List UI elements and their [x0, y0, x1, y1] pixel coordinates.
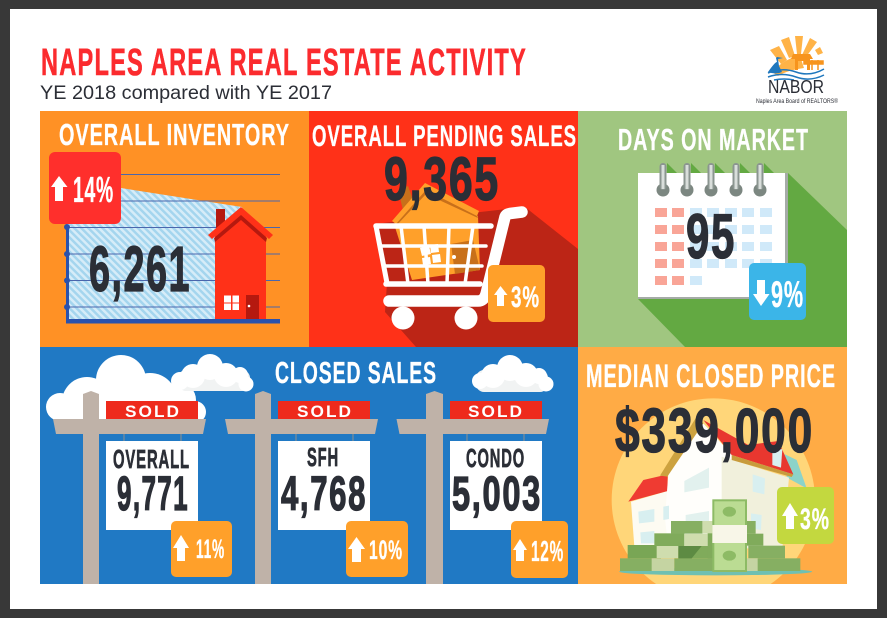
- badge: up 3%: 3%: [511, 281, 540, 314]
- badge: up 14%: [49, 152, 121, 224]
- badge: up 3%: [488, 265, 545, 322]
- sign: overall: 9,771: [117, 468, 189, 521]
- sign: SFH: 4,768: [281, 468, 367, 521]
- sign: SFH: SOLD: [297, 402, 353, 421]
- badge: up 14%: 14%: [73, 169, 114, 210]
- badge: up 10%: 10%: [369, 535, 403, 565]
- heading: overall inventory: OVERALL INVENTORY: [59, 117, 290, 152]
- icon: house in cart: [392, 183, 480, 280]
- badge: up 11%: 11%: [196, 534, 225, 564]
- icon: calendar: [638, 163, 788, 299]
- sign: overall: SOLD: [125, 402, 181, 421]
- badge: down 9%: 9%: [771, 274, 804, 315]
- sign: overall: OVERALL: [113, 444, 190, 474]
- sign: condo: [396, 391, 549, 584]
- panel: closed sales: [40, 347, 578, 584]
- value: 9,365: 9,365: [384, 145, 500, 213]
- badge: up 10%: [346, 521, 408, 577]
- icon: shopping cart: [376, 212, 522, 330]
- cart shadow: [374, 207, 578, 347]
- panel: median closed price: [578, 347, 847, 602]
- icon: large cloud: [46, 355, 206, 427]
- heading: closed sales: CLOSED SALES: [275, 355, 437, 390]
- sign: SFH: [225, 391, 378, 584]
- panel: days on market: [578, 111, 847, 347]
- badge: up 12%: 12%: [531, 536, 564, 568]
- icon: red house: [208, 207, 273, 319]
- subtitle: YE 2018 compared with YE 2017: [40, 83, 332, 104]
- badge: down 9%: [749, 263, 806, 320]
- badge: up 3%: 3%: [800, 503, 830, 536]
- panel: overall inventory: [40, 111, 309, 347]
- heading: overall pending sales: OVERALL PENDING SALES: [312, 120, 577, 153]
- sign: condo: CONDO: [466, 443, 525, 473]
- icon: cloud 3: [472, 355, 554, 392]
- badge: up 3%: [777, 487, 834, 544]
- title: NAPLES AREA REAL ESTATE ACTIVITY: [41, 42, 527, 84]
- badge: up 12%: [511, 521, 568, 578]
- illustration: house and money: [612, 398, 815, 602]
- logo: NABOR: [756, 36, 838, 105]
- badge: up 11%: [171, 521, 232, 577]
- value: 6,261: 6,261: [89, 233, 191, 305]
- sign: condo: SOLD: [468, 402, 524, 421]
- sign: overall: [53, 391, 206, 584]
- panel: overall pending sales: [309, 111, 578, 347]
- icon: cloud 2: [171, 354, 254, 392]
- sign: condo: 5,003: [452, 468, 542, 521]
- logo: NABOR: NABOR: [768, 77, 824, 97]
- logo: NABOR: Naples Area Board of REALTORS®: [756, 97, 838, 105]
- value: 95: 95: [686, 202, 736, 272]
- sign: SFH: SFH: [307, 442, 339, 472]
- area chart: [64, 174, 280, 324]
- value: $339,000: $339,000: [615, 397, 814, 466]
